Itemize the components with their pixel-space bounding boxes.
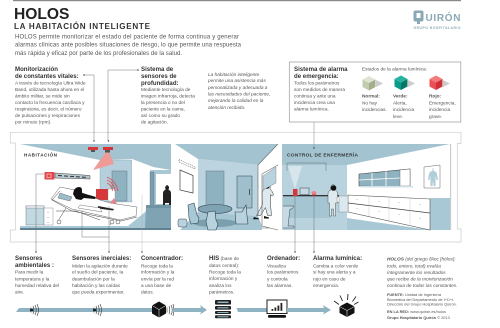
intro text <box>15 34 242 57</box>
text: sistema de alarma de emergencia: alarma lumínica. <box>294 106 329 112</box>
text: sistema de alarma de emergencia: Sistema de alarma <box>294 66 348 73</box>
text: ordenador: los parámetros <box>267 270 299 276</box>
text: monitorización de constantes vitales: por minuto (rpm). <box>15 120 51 126</box>
floor <box>20 208 171 230</box>
text: HIS: Recoge toda la <box>209 270 241 276</box>
text: sistema de sensores de profundidad: de agitación. <box>141 120 168 126</box>
text: concentrador: datos. <box>141 290 154 296</box>
text: concentrador: Recoge toda la <box>141 263 173 269</box>
text: monitorización de constantes vitales: de pulsaciones y respiraciones <box>15 113 81 119</box>
text: HIS: analiza los <box>209 283 232 289</box>
text: concentrador: información y la <box>141 270 175 276</box>
text: concentrador: Concentrador: <box>141 255 183 262</box>
italic note <box>207 72 270 111</box>
icon: signal waves 3 <box>167 304 174 316</box>
nurse figure <box>328 184 340 216</box>
logo: Quirón: UIRÓN <box>426 11 460 24</box>
text: sistema de alarma de emergencia: incidencia crea una <box>294 100 335 106</box>
window on wall <box>180 170 193 193</box>
intro text: más rápida y eficaz por parte de los profesionales de la salud. <box>15 51 182 57</box>
text: monitorización de constantes vitales: Monitorización <box>15 66 58 73</box>
text: sensores ambientales: Sensores <box>15 255 43 262</box>
label: habitación: HABITACIÓN <box>24 150 58 158</box>
text: monitorización de constantes vitales: respiratoria, es decir, el número <box>15 106 82 112</box>
text: alarma lumínica: si hay una alerta y a <box>313 270 356 276</box>
icon: ambient sensor on wall <box>44 172 90 180</box>
nursing desk <box>283 188 339 218</box>
text: sistema de sensores de profundidad: sensores de <box>141 73 177 80</box>
italic definition of HOLOS: todo, entero, total) evalúa <box>387 264 441 270</box>
ceiling <box>20 144 171 170</box>
table and chairs <box>178 203 248 230</box>
icon: alarm signal and monitor <box>96 177 118 201</box>
text: ordenador <box>267 255 300 289</box>
floor <box>180 212 262 230</box>
italic definition of HOLOS <box>387 256 458 289</box>
label: control de enfermería: CONTROL DE ENFERMERÍA <box>287 150 359 158</box>
icon: signal waves 1 <box>30 304 38 316</box>
illustration frame <box>10 132 461 242</box>
italic definition of HOLOS: HOLOS (del griego ὅλος [hólos]: <box>387 256 456 262</box>
text: sensores ambientales <box>15 255 59 296</box>
back wall and door <box>100 159 171 210</box>
text: sensores inerciales: Sensores inerciales: <box>72 255 131 262</box>
italic definition of HOLOS: que recibe de la monitorización <box>387 276 453 282</box>
text: monitorización de constantes vitales: A través de tecnología Ultra Wide <box>15 80 86 86</box>
text: monitorización de constantes vitales: ámbito militar, se mide sin <box>15 94 70 100</box>
panel: control de enfermería scene <box>282 144 451 230</box>
text: sensores inerciales: que pueda experimentar. <box>72 290 125 296</box>
text: monitorización de constantes vitales <box>15 66 86 126</box>
text: sensores ambientales: humedad relativa del <box>15 283 59 289</box>
text: sistema de sensores de profundidad: Mediante tecnología de <box>141 87 191 93</box>
text: sistema de alarma de emergencia: continua y ante una <box>294 94 336 100</box>
source credits: EN LA RED: www.quiron.es/holos <box>387 309 446 314</box>
text: monitorización de constantes vitales: contacto la frecuencia cardíaca y <box>15 100 85 106</box>
legend: normal: No hay <box>362 100 378 106</box>
legend: rojo: Rojo: <box>429 94 442 100</box>
ceiling <box>282 144 450 165</box>
title <box>14 6 151 31</box>
text: sensores ambientales: temperatura y la <box>15 276 50 282</box>
legend: verde: Alerta, <box>393 100 407 106</box>
ceiling <box>175 144 278 165</box>
legend: verde: leve. <box>393 114 403 120</box>
text: sistema de alarma de emergencia: son medidos de manera <box>294 87 345 93</box>
source credits <box>387 292 457 320</box>
icon: computer monitor <box>267 300 287 318</box>
text: concentrador: envía por la red <box>141 276 174 282</box>
icon: alarm light cube <box>334 294 358 317</box>
text: HIS: información y <box>209 276 238 282</box>
text: sistema de sensores de profundidad: así como su grado <box>141 113 180 119</box>
text: alarma lumínica: Alarma lumínica: <box>313 255 362 262</box>
italic note: mejorando la calidad en la <box>208 98 264 104</box>
legend: rojo: incidencia <box>429 107 450 113</box>
italic note: atención recibida. <box>208 105 245 111</box>
panel: sala de estar scene <box>175 144 278 230</box>
right wall opening <box>258 144 278 230</box>
alarm light beams <box>288 166 302 189</box>
flow arrow: sensors to concentrator <box>16 308 152 312</box>
text: alarma lumínica <box>313 255 362 289</box>
text: ordenador: Visualiza <box>267 263 286 269</box>
legend: verde: incidencia <box>393 107 414 113</box>
text: sensores inerciales: el sueño del paciente, la <box>72 270 124 276</box>
icon: ceiling sensors <box>88 147 114 170</box>
source credits: FUENTE: Unidad de Ingeniería <box>387 292 442 297</box>
intro text: alarmas clínicas ante posibles situaciones de riesgo, lo que permite una respuesta <box>15 42 242 48</box>
legend: verde: Verde: <box>393 94 408 100</box>
source credits: Biomédica del Departamento de I+D+i, <box>387 297 454 302</box>
legend: verde <box>393 76 415 120</box>
panel: emergency alarm system <box>289 62 461 122</box>
text: sensores inerciales: Miden la agitación durante <box>72 263 128 269</box>
text: sistema de alarma de emergencia: Todos los parámetros <box>294 80 340 86</box>
text: concentrador <box>141 255 183 296</box>
text: HIS <box>209 255 241 296</box>
text: sistema de sensores de profundidad: paciente en la cama, <box>141 106 185 112</box>
legend: normal <box>362 76 387 113</box>
title: LA HABITACIÓN INTELIGENTE <box>14 22 151 31</box>
text: sensores ambientales: aire. <box>15 290 24 296</box>
source credits: Dirección del Grupo Hospitalario Quirón. <box>387 302 457 306</box>
italic note: La habitación inteligente <box>208 72 260 78</box>
text: HIS: datos central): <box>209 263 239 269</box>
arrow: concentrator to HIS <box>173 305 207 314</box>
back wall <box>198 159 258 216</box>
text: ordenador: Ordenador: <box>267 255 300 262</box>
drawers <box>339 195 430 230</box>
leader lines <box>35 69 315 253</box>
text: sistema de sensores de profundidad <box>141 66 195 126</box>
text: sistema de sensores de profundidad: imagen infrarroja, detecta <box>141 94 195 100</box>
text: sistema de sensores de profundidad: la presencia o no del <box>141 100 185 106</box>
bracket sign <box>287 163 326 171</box>
text: sistema de alarma de emergencia: de emergencia: <box>294 73 339 80</box>
text: sensores inerciales: habitación y las caídas <box>72 283 121 289</box>
text: HIS: parámetros. <box>209 290 234 296</box>
icon: concentrator cube <box>152 302 166 318</box>
legend: rojo <box>429 76 456 120</box>
logo: Quirón <box>414 10 461 30</box>
text: ordenador: y controla <box>267 276 288 282</box>
legend: rojo: grave. <box>429 114 442 120</box>
text: alarma lumínica: rojo en caso de <box>313 276 346 282</box>
text: sistema de sensores de profundidad: profundidad: <box>141 80 179 87</box>
italic note: personalizada y adecuada a <box>207 85 268 91</box>
icon: visitor figure and bench <box>145 185 171 228</box>
italic note: las necesidades del paciente, <box>208 92 270 98</box>
italic definition of HOLOS: continua de todas las constantes. <box>387 283 458 289</box>
legend: normal: Normal: <box>362 94 380 100</box>
panel: habitación scene <box>20 144 171 230</box>
stool <box>283 206 294 228</box>
text: monitorización de constantes vitales: de constantes vitales: <box>15 73 79 80</box>
text: alarma lumínica: emergencia. <box>313 283 339 289</box>
wall light strip <box>179 160 195 169</box>
legend heading: Estados de la alarma lumínica: <box>362 66 427 72</box>
italic definition of HOLOS: íntegramente los resultados <box>387 270 446 276</box>
text: HIS: HIS (base de <box>209 255 239 262</box>
upper cabinets <box>359 169 413 188</box>
text: alarma lumínica: Cambia a color verde <box>313 263 359 269</box>
text: concentrador: a una base de <box>141 283 171 289</box>
doors <box>206 171 252 208</box>
arrow: HIS to computer <box>236 308 267 312</box>
text: sistema de sensores de profundidad: Sistema de <box>141 66 174 73</box>
text: sensores ambientales: Para medir la <box>15 270 44 276</box>
icon: bedside cabinet <box>26 206 53 225</box>
source credits: Grupo Hospitalario Quirón © 2013 <box>387 315 450 320</box>
legend: normal: incidencias. <box>362 107 387 113</box>
italic note: permite una asistencia más <box>207 78 266 84</box>
text: ordenador: las alarmas. <box>267 283 293 289</box>
text: monitorización de constantes vitales: Band, utilizada hasta ahora en el <box>15 87 84 93</box>
back wall <box>282 165 347 230</box>
icon: HIS server <box>215 300 231 318</box>
intro text: HOLOS permite monitorizar el estado del paciente de forma continua y generar <box>15 34 239 40</box>
icon: signal waves 2 <box>93 304 102 316</box>
doctor figure <box>253 183 274 219</box>
text: sensores ambientales: ambientales : <box>15 262 54 269</box>
text: sensores inerciales <box>72 255 131 296</box>
text: sensores inerciales: deambulación por la <box>72 276 115 282</box>
logo: Quirón: GRUPO HOSPITALARIO <box>414 26 461 30</box>
icon: hospital bed with patient <box>51 187 137 225</box>
text: sistema de alarma de emergencia <box>294 66 348 112</box>
title: HOLOS <box>14 6 69 23</box>
poster: human body <box>424 165 440 188</box>
floor corner <box>347 198 450 230</box>
legend: rojo: Emergencia, <box>429 100 456 106</box>
arrow: computer to alarm <box>287 305 331 314</box>
